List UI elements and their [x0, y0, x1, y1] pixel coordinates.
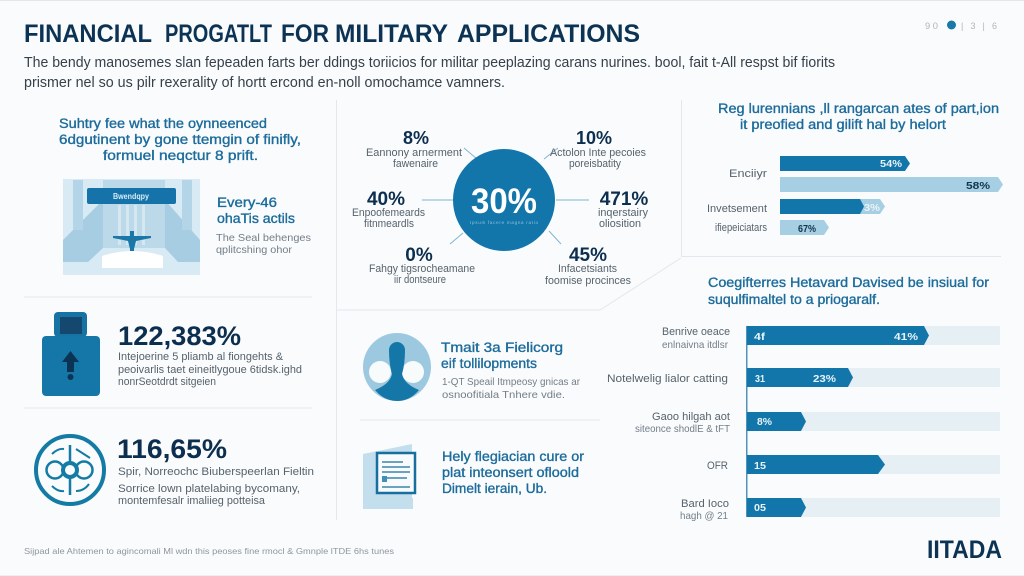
stat: 45%: 45% [569, 245, 607, 266]
panel: profile note [363, 333, 580, 401]
connector lines [422, 148, 589, 244]
stat: 122,383%: 122,383% [118, 321, 241, 351]
panel: top right bar chart [707, 101, 1003, 235]
bar labels: siteonce shodlE & tFT [635, 423, 731, 435]
document text [442, 449, 585, 496]
stat: 116,65%: 116,65% [117, 434, 227, 464]
stat: 10% [550, 128, 646, 170]
stat: every-46: The Seal behenges [216, 232, 311, 244]
title: MILITARY [335, 20, 448, 48]
stat: 116,65% [117, 434, 314, 507]
title [24, 20, 640, 48]
icon: locked case [42, 312, 100, 396]
central circle [453, 149, 555, 251]
stat: 0% [369, 245, 475, 286]
footer source note: Sijpad ale Ahtemen to agincomali Ml wdn this peoses fine rmocl & Gmnple lTDE 6hs tunes [24, 546, 394, 556]
stat: 0%: 0% [405, 245, 433, 266]
bars: 67% [798, 224, 816, 235]
icon: circular hub [36, 436, 104, 504]
stat: 8%: Eannony arnerment [366, 147, 462, 159]
stat: 116,65%: montemfesalr imaliieg potteisa [118, 495, 266, 507]
bar values: 8% [757, 416, 773, 428]
bar fills [747, 326, 929, 517]
logo: IITADA [927, 536, 1002, 564]
bar tracks [747, 326, 1000, 517]
bar labels: Notelwelig lialor catting [607, 373, 728, 385]
icon: document [363, 444, 415, 509]
bar values: 31 [755, 373, 765, 385]
intro text: The bendy manosemes slan fepeaden farts ber ddings toriicios for militar peeplazing carans nurines. bool, fait t-All respst bif fiorits [24, 55, 835, 71]
bar values: 41% [894, 331, 919, 343]
left heading: 6dgutinent by gone ttemgin of finifly, [59, 132, 301, 147]
bar labels: Enciiyr [729, 168, 767, 180]
profile text: eif tollilopments [441, 356, 537, 371]
bar labels [707, 168, 767, 234]
pagination marker: 9 0 [925, 21, 938, 31]
stat: 122,383%: nonrSeotdrdt sitgeien [118, 376, 216, 388]
bar labels: ifiepeiciatars [715, 222, 767, 234]
stat: 122,383% [118, 321, 302, 388]
stat: 8% [366, 128, 462, 170]
profile text: 1-QT Speail Itmpeosy gnicas ar [442, 376, 580, 388]
central circle: 30% [471, 182, 537, 221]
pagination marker: | 3 | 6 [961, 21, 997, 31]
stat: 122,383%: peoivarlis taet eineitlygoue 6tidsk.ighd [118, 364, 302, 376]
stat: 8%: 8% [403, 128, 429, 148]
bars: 58% [966, 181, 990, 192]
stat: 471% [598, 189, 648, 230]
bars: 3% [864, 203, 880, 214]
stat: 10%: 10% [576, 128, 612, 148]
stat: every-46 [216, 195, 311, 256]
chart heading: it preofied and gilift hal by helort [740, 117, 946, 132]
stat: 116,65%: Spir, Norreochc Biuberspeerlan Fieltin [118, 466, 314, 478]
stat: 40%: Enpoofemeards [352, 207, 425, 219]
stat: 10%: poreisbatity [569, 158, 621, 170]
pagination marker [925, 20, 997, 31]
profile text [441, 340, 580, 401]
left heading [59, 116, 301, 163]
bar labels: OFR [707, 460, 728, 472]
stat: 40% [352, 189, 425, 230]
stat: 122,383%: Intejoerine 5 pliamb al fiongehts & [118, 351, 284, 363]
bar labels [607, 326, 731, 522]
stat: 0%: Fahgy tigsrocheamane [369, 263, 475, 275]
stat: every-46: Every-46 [217, 195, 277, 210]
stat: 471%: inqerstairy [598, 207, 648, 219]
bar labels: Gaoo hilgah aot [652, 411, 730, 423]
intro text [24, 55, 835, 91]
bar values [754, 331, 919, 514]
chart heading: Coegifterres Hetavard Davised be insiual for [708, 275, 990, 290]
stat: 45%: foomise procinces [545, 275, 631, 287]
stat: 471%: oliosition [599, 218, 641, 230]
title: APPLICATIONS [457, 20, 640, 48]
stat: 471%: 471% [600, 189, 648, 210]
title: FOR [281, 20, 329, 48]
title: PROGATLT [165, 20, 272, 48]
chart heading: Reg lurennians ,ll rangarcan ates of part,ion [718, 101, 999, 116]
illustration: aircraft hangar [63, 179, 200, 275]
left heading: Suhtry fee what the oynneenced [59, 116, 267, 131]
illustration: aircraft hangar: Bwendqpy [113, 192, 149, 201]
bar labels: Bard Ioco [681, 498, 729, 510]
bar labels: Invetsement [707, 203, 767, 215]
stat: every-46: ohaTis actils [217, 211, 295, 226]
chart heading [718, 101, 999, 132]
stat: 8%: fawenaire [393, 158, 438, 170]
stat: every-46: qplitcshing ohor [216, 244, 293, 256]
panel: document note [363, 444, 585, 509]
profile text: osnoofitiala Tnhere vdie. [442, 389, 565, 401]
document text: Hely flegiacian cure or [442, 449, 585, 464]
stat: 45% [545, 245, 631, 287]
bar values: 05 [754, 502, 766, 514]
panel: donut stats [352, 128, 648, 287]
profile text: Tmait 3a Fielicorg [441, 340, 563, 355]
panel: left column [36, 116, 314, 507]
intro text: prismer nel so us pilr rexerality of hortt ercond en-noll omochamce vamners. [24, 75, 505, 91]
stat: 40%: 40% [367, 189, 405, 210]
document text: Dimelt ierain, Ub. [442, 481, 547, 496]
bar values: 15 [754, 460, 766, 472]
stat: 0%: iir dontseure [394, 274, 446, 286]
bars [780, 156, 1003, 235]
bar values: 4f [754, 331, 766, 343]
chart heading: suqulfimaltel to a priogaralf. [708, 292, 880, 307]
bar values: 23% [813, 373, 837, 385]
document text: plat inteonsert ofloold [442, 465, 579, 480]
stat: 40%: fitnmeardls [364, 218, 414, 230]
bar labels: Benrive oeace [662, 326, 730, 338]
icon: person avatar [363, 333, 431, 401]
bars: 54% [880, 159, 902, 170]
panel: bottom right bar chart [607, 275, 1000, 522]
stat: 10%: Actolon Inte pecoies [550, 147, 646, 159]
central circle: Ipsum facere magna ratio [470, 220, 538, 225]
stat: 45%: Infacetsiants [558, 263, 617, 275]
stat: 116,65%: Sorrice lown platelabing bycomany, [118, 483, 300, 495]
chart heading [708, 275, 990, 307]
title: FINANCIAL [24, 20, 152, 48]
bar labels: hagh @ 21 [680, 510, 728, 522]
bar labels: enlnaivna itdlsr [662, 339, 728, 351]
left heading: formuel neqctur 8 prift. [103, 148, 258, 163]
